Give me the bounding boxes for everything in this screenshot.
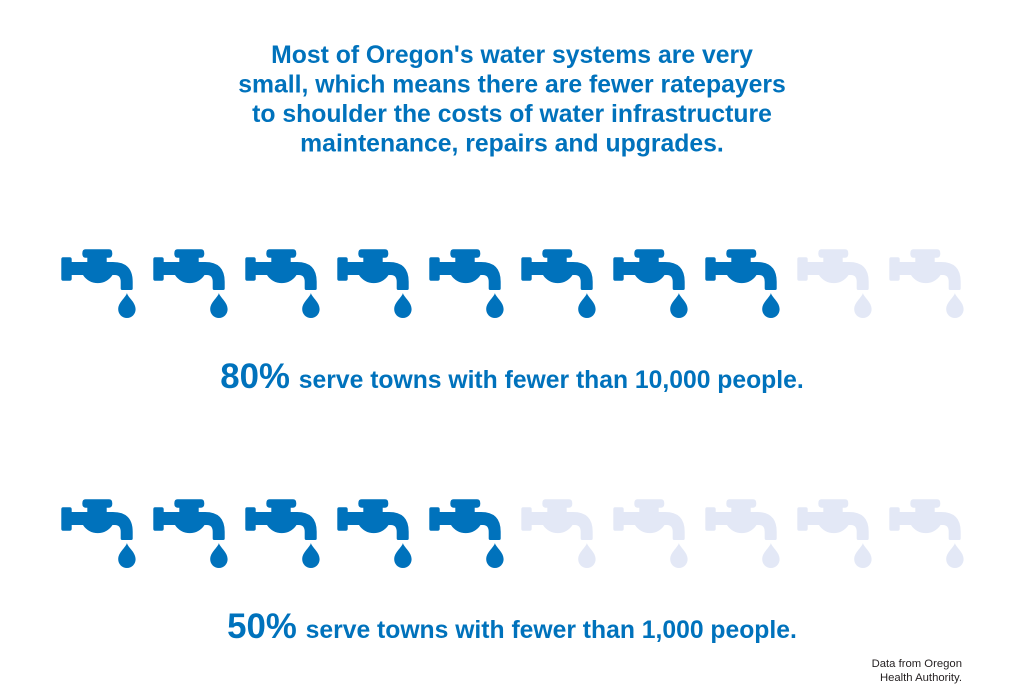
source note: Data from Oregon bbox=[872, 658, 962, 670]
faucet row: 50 percent bbox=[61, 499, 964, 568]
statistic: 50 percent: 50% serve towns with fewer than 1,000 people. bbox=[227, 607, 797, 646]
title: Most of Oregon's water systems are very bbox=[271, 42, 753, 69]
title: small, which means there are fewer ratepayers bbox=[238, 72, 786, 99]
statistic: 80 percent: 80% serve towns with fewer than 10,000 people. bbox=[220, 357, 804, 396]
title: maintenance, repairs and upgrades. bbox=[300, 131, 724, 158]
source note: Health Authority. bbox=[880, 672, 962, 684]
faucet row: 80 percent bbox=[61, 249, 964, 318]
title: to shoulder the costs of water infrastructure bbox=[252, 101, 772, 128]
